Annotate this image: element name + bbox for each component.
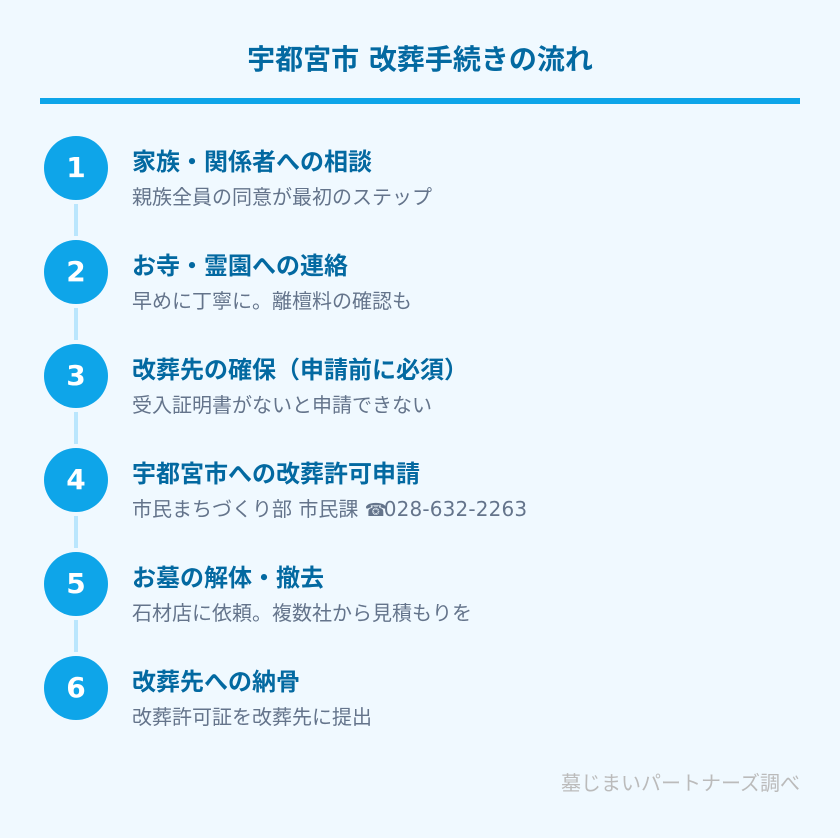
connector 4-5 xyxy=(74,516,78,548)
number badge 4: 4 xyxy=(66,463,86,496)
step 3 xyxy=(44,344,468,417)
step 2 xyxy=(44,240,412,313)
step 4 heading: 宇都宮市への改葬許可申請 xyxy=(132,460,420,488)
connector 3-4 xyxy=(74,412,78,444)
step 4 description: 市民まちづくり部 市民課 028-632-2263 xyxy=(132,497,527,521)
number badge 3 xyxy=(44,344,108,408)
step 4 xyxy=(44,448,527,521)
connector 2-3 xyxy=(74,308,78,340)
connector 1-2 xyxy=(74,204,78,236)
step 3 description: 受入証明書がないと申請できない xyxy=(132,393,432,417)
step 5 description: 石材店に依頼。複数社から見積もりを xyxy=(132,601,472,625)
connector 5-6 xyxy=(74,620,78,652)
number badge 1: 1 xyxy=(66,151,86,184)
title: 宇都宮市 改葬手続きの流れ xyxy=(247,43,593,76)
number badge 2 xyxy=(44,240,108,304)
title rule xyxy=(40,98,800,104)
step 1 xyxy=(44,136,432,209)
step 1 description: 親族全員の同意が最初のステップ xyxy=(132,185,432,209)
step 6 heading: 改葬先への納骨 xyxy=(132,668,300,696)
number badge 6: 6 xyxy=(66,671,86,704)
number badge 2: 2 xyxy=(66,255,86,288)
step 6 xyxy=(44,656,372,729)
step 6 description: 改葬許可証を改葬先に提出 xyxy=(132,705,372,729)
number badge 5: 5 xyxy=(66,567,86,600)
source credit: 墓じまいパートナーズ調べ xyxy=(561,771,800,795)
step 1 heading: 家族・関係者への相談 xyxy=(132,148,372,176)
number badge 5 xyxy=(44,552,108,616)
step 2 heading: お寺・霊園への連絡 xyxy=(132,252,348,280)
number badge 1 xyxy=(44,136,108,200)
number badge 3: 3 xyxy=(66,359,86,392)
step 3 heading: 改葬先の確保（申請前に必須） xyxy=(132,356,468,384)
step 5 xyxy=(44,552,472,625)
step 4 description: ☎ xyxy=(365,500,387,521)
step 5 heading: お墓の解体・撤去 xyxy=(132,564,324,592)
number badge 4 xyxy=(44,448,108,512)
number badge 6 xyxy=(44,656,108,720)
step 2 description: 早めに丁寧に。離檀料の確認も xyxy=(132,289,412,313)
